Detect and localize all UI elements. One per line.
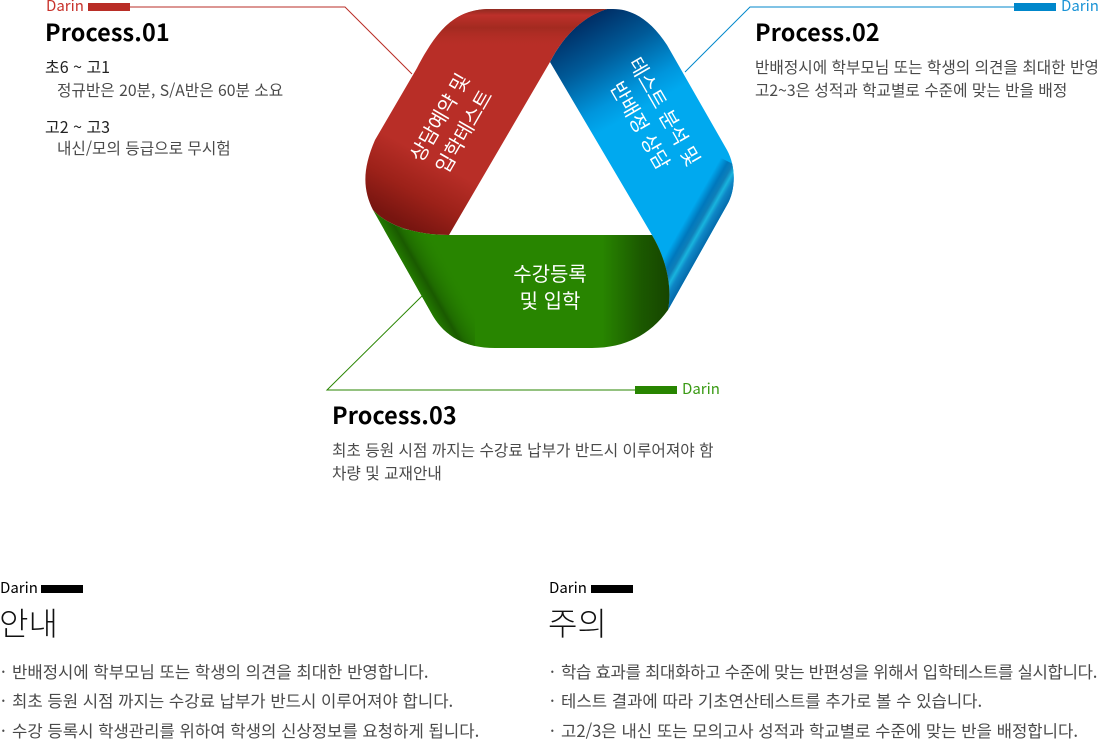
panel: caution: [548, 577, 1097, 742]
heading: Process.01: Process.01: [45, 14, 170, 48]
ribbon label: red: 상담예약 및: [401, 67, 475, 166]
text: caution line 1: ·: [550, 659, 554, 683]
text: process 03 description line 2: 차량 및 교재안내: [332, 461, 442, 484]
tag: Darin black: Darin: [0, 577, 38, 598]
text: caution line 2: ·: [550, 688, 555, 712]
ribbon segment: red: [365, 9, 607, 235]
panel: process 02: [755, 0, 1099, 101]
tag: Darin green: Darin: [682, 378, 720, 399]
ribbon label: blue: 테스트 분석 및: [623, 51, 709, 171]
text: process 02 description line 2: 고2~3은 성적과 학교별로 수준에 맞는 반을 배정: [755, 78, 1067, 101]
ribbon label: red: 입학테스트: [427, 84, 498, 178]
connector line: process 02: [685, 7, 1014, 72]
text: high 2 to 3 detail: 내신/모의 등급으로 무시험: [57, 136, 231, 159]
text: process 03 description: 최초 등원 시점 까지는 수강료 납부가 반드시 이루어져야 함: [332, 438, 714, 461]
text: caution line 2: 테스트 결과에 따라 기초연산테스트를 추가로 볼 수 있습니다.: [561, 688, 982, 712]
text: guide line 3: ·: [1, 718, 6, 742]
text: caution line 3: ·: [550, 718, 555, 742]
connector line: process 03: [327, 294, 635, 390]
ribbon label: green: 수강등록: [513, 258, 587, 287]
ribbon label: blue: 반배정 상담: [604, 75, 678, 174]
heading: Process.02: Process.02: [755, 14, 880, 48]
text: caution line 1: 학습 효과를 최대화하고 수준에 맞는 반편성을 위해서 입학테스트를 실시합니다.: [561, 659, 1097, 683]
ribbon segment: green: [373, 210, 670, 348]
text: guide line 3: 수강 등록시 학생관리를 위하여 학생의 신상정보를 요청하게 됩니다.: [12, 718, 479, 742]
connector line: process 01: [130, 7, 412, 74]
text: elementary to high 1: 초6 ~ 고1: [45, 54, 110, 78]
text: caution line 3: 고2/3은 내신 또는 모의고사 성적과 학교별로 수준에 맞는 반을 배정합니다.: [561, 718, 1078, 742]
heading: Process.03: Process.03: [332, 397, 457, 431]
tag bar: red: [88, 3, 130, 11]
ribbon segment: blue: [550, 9, 734, 310]
panel: guide: [0, 577, 479, 742]
cycle diagram: triangular ribbon: [355, 0, 745, 355]
tag bar: black: [591, 585, 633, 593]
text: guide line 2: 최초 등원 시점 까지는 수강료 납부가 반드시 이루어져야 합니다.: [12, 688, 453, 712]
text: high 2 to 3: 고2 ~ 고3: [45, 114, 110, 138]
tag bar: black: [41, 585, 83, 593]
tag bar: green: [635, 386, 677, 394]
text: elementary to high 1 detail: 정규반은 20분, S/A반은 60분 소요: [57, 78, 283, 101]
heading: guide: 안내: [0, 599, 58, 645]
tag: Darin black: Darin: [549, 577, 587, 598]
panel: process 01: [45, 0, 283, 159]
text: guide line 1: ·: [1, 659, 6, 683]
text: guide line 2: ·: [1, 688, 6, 712]
text: process 02 description: 반배정시에 학부모님 또는 학생의 의견을 최대한 반영: [755, 55, 1099, 78]
heading: caution: 주의: [548, 599, 607, 645]
ribbon label: green: 및 입학: [520, 285, 580, 314]
tag bar: blue: [1014, 3, 1056, 11]
panel: process 03: [332, 378, 720, 484]
text: guide line 1: 반배정시에 학부모님 또는 학생의 의견을 최대한 반영합니다.: [12, 659, 429, 683]
